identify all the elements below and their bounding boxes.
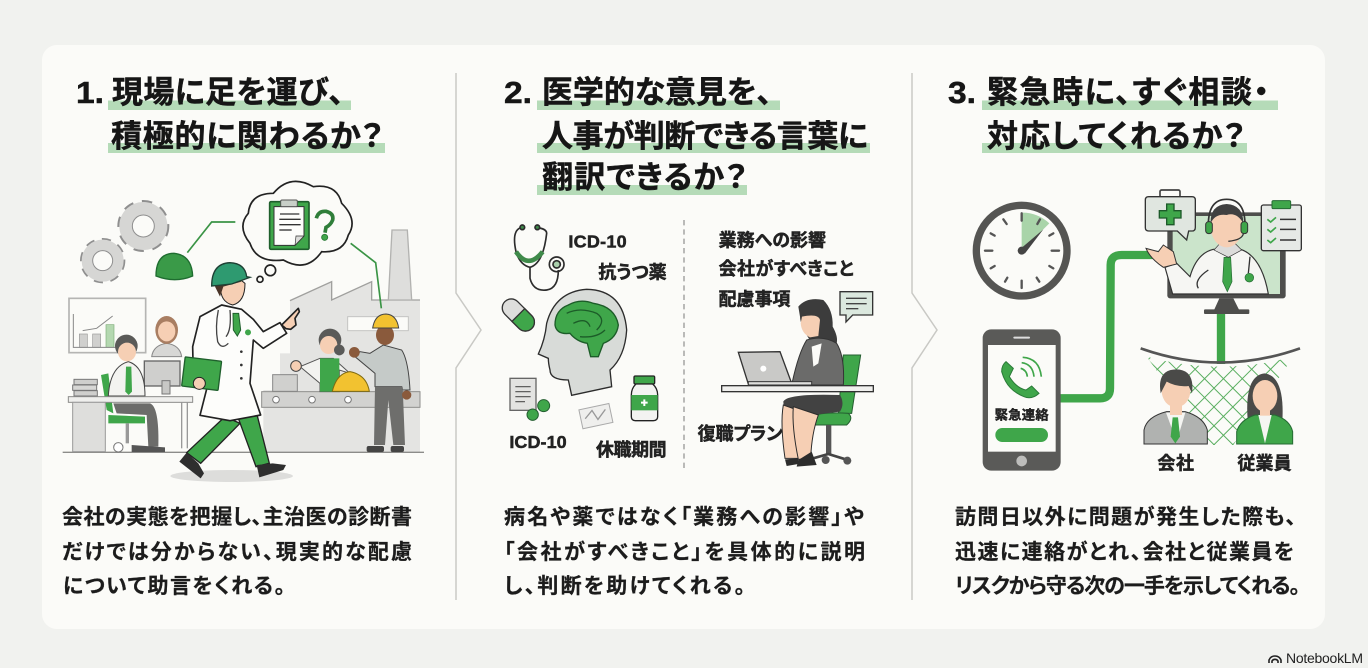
employee person — [1237, 373, 1293, 444]
office workers — [68, 316, 193, 452]
body text column 2: し、判断を助けてくれる。 — [504, 575, 745, 598]
body text column 3: リスクから守る次の一手を示してくれる。 — [955, 575, 1300, 598]
label 復職プラン: 復職プラン — [698, 424, 783, 444]
icon: head with brain — [538, 289, 627, 395]
label 業務への影響: 業務への影響 — [719, 230, 826, 251]
body text column 1: について助言をくれる。 — [63, 575, 285, 598]
illustration: doctor visiting workplace — [63, 181, 424, 482]
connector lines — [187, 222, 381, 308]
heading 1: 積極的に関わるか？ — [111, 119, 383, 154]
factory workers — [291, 314, 411, 452]
icon: document and pills — [510, 378, 550, 420]
icon: first aid speech bubble — [1145, 190, 1195, 240]
divider arrow between columns 2 and 3 — [912, 73, 937, 600]
body text column 3: 迅速に連絡がとれ、会社と従業員を — [955, 540, 1294, 564]
ground line — [63, 450, 424, 454]
company person — [1144, 369, 1207, 444]
heading 2: 人事が判断できる言葉に — [542, 119, 868, 154]
icon: crumpled note — [579, 403, 613, 429]
icon: speech bubble — [840, 292, 873, 322]
person working at laptop — [722, 299, 873, 467]
icon: stethoscope — [515, 225, 564, 290]
green connector lines — [1060, 255, 1221, 398]
icon: checklist clipboard — [1261, 201, 1301, 251]
chart on the wall — [69, 298, 146, 353]
icon: medicine bottle — [631, 376, 658, 421]
body text column 1: 会社の実態を把握し、主治医の診断書 — [62, 506, 412, 529]
label 会社がすべきこと: 会社がすべきこと — [719, 258, 854, 279]
label 緊急連絡: 緊急連絡 — [995, 406, 1049, 422]
icon: clock — [976, 205, 1067, 296]
label 抗うつ薬: 抗うつ薬 — [598, 262, 667, 282]
heading 2 — [504, 75, 870, 195]
illustration: emergency contact — [976, 190, 1301, 473]
label 会社: 会社 — [1157, 453, 1194, 473]
body text column 1: だけでは分からない、現実的な配慮 — [62, 541, 412, 564]
icon: gears — [85, 205, 164, 279]
heading 3: 対応してくれるか？ — [987, 119, 1245, 154]
body text column 2: 「会社がすべきこと」を具体的に説明 — [504, 540, 865, 564]
doctor walking — [170, 263, 299, 482]
heading 2: 医学的な意見を、 — [542, 75, 772, 110]
thought bubble with clipboard — [243, 181, 352, 282]
NotebookLM logo: NotebookLM — [1286, 650, 1363, 666]
icon: monitor with doctor — [1146, 199, 1286, 314]
heading 2: 翻訳できるか？ — [542, 160, 747, 195]
icon: green hard hat — [156, 253, 193, 280]
icon: smartphone — [983, 329, 1061, 471]
heading 3 — [948, 75, 1278, 154]
illustration: medical terms and workplace translation — [499, 220, 873, 470]
label 配慮事項: 配慮事項 — [719, 290, 790, 310]
label 従業員: 従業員 — [1237, 453, 1292, 473]
label ICD-10 lower: ICD-10 — [509, 432, 567, 452]
safety net — [1141, 348, 1300, 445]
heading 1: 1. — [76, 75, 104, 110]
body text column 2 — [504, 506, 865, 598]
icon: capsule — [499, 295, 538, 335]
body text column 1 — [62, 506, 412, 598]
heading 2: 2. — [504, 75, 532, 110]
dashed divider — [682, 220, 686, 470]
label ICD-10: ICD-10 — [568, 231, 627, 251]
heading 3: 緊急時に、すぐ相談・ — [987, 75, 1269, 110]
label 休職期間: 休職期間 — [596, 440, 667, 460]
heading 3: 3. — [948, 75, 976, 110]
body text column 2: 病名や薬ではなく「業務への影響」や — [504, 506, 864, 529]
body text column 3: 訪問日以外に問題が発生した際も、 — [955, 505, 1296, 529]
heading 1: 現場に足を運び、 — [112, 75, 344, 110]
heading 1 — [76, 75, 385, 154]
factory background — [262, 230, 420, 452]
body text column 3 — [955, 505, 1300, 598]
divider arrow between columns 1 and 2 — [456, 73, 481, 600]
